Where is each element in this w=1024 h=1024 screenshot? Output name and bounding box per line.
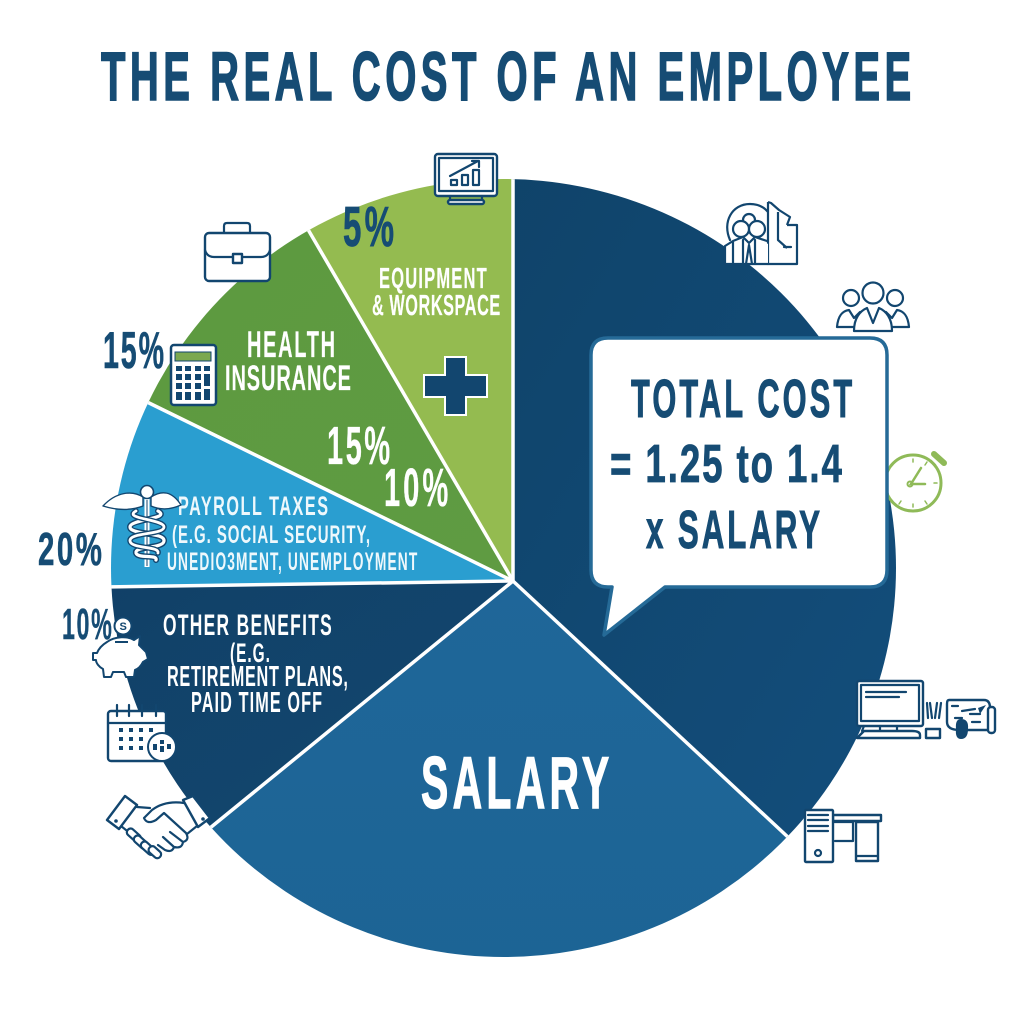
percent: 20%: 20%: [38, 525, 102, 576]
callout: total cost: TOTAL COST: [631, 369, 852, 429]
icon: calendar: [108, 705, 176, 761]
label: other benefits: (E.G.: [230, 637, 270, 668]
callout: total cost: x SALARY: [646, 500, 820, 560]
label: health insurance: INSURANCE: [225, 359, 351, 399]
icon: stopwatch: [885, 454, 944, 511]
callout: total cost: [591, 338, 887, 635]
label: payroll taxes: UNEDIO3MENT, UNEMPLOYMENT: [167, 549, 418, 576]
icon: team with door: [725, 202, 797, 264]
callout: total cost: = 1.25 to 1.4: [610, 433, 842, 494]
icon: monitor with chart: [435, 154, 497, 204]
label: health insurance: HEALTH: [247, 325, 335, 366]
icon: briefcase: [205, 223, 270, 281]
percent: outer 15%: 15%: [103, 321, 164, 379]
slice: payroll taxes: [111, 402, 506, 587]
slice: salary: [210, 583, 788, 957]
label: other benefits: PAID TIME OFF: [191, 686, 322, 718]
icon: computer and desk tools: [857, 681, 995, 739]
label: other benefits: [163, 609, 348, 718]
slice: equipment and workspace: [308, 179, 513, 575]
icon: caduceus: [103, 486, 181, 567]
title: THE REAL COST OF AN EMPLOYEE: [101, 38, 911, 115]
icon: team of three: [837, 282, 909, 331]
label: health insurance: [225, 325, 351, 399]
icon: tower pc and desk: [805, 810, 881, 862]
slice: health insurance: [148, 230, 509, 577]
label: equipment and workspace: EQUIPMENT: [379, 263, 487, 295]
icon: calculator: [171, 345, 216, 405]
label: payroll taxes: (E.G. SOCIAL SECURITY,: [172, 521, 370, 549]
percent: inner 15%: 15%: [327, 417, 390, 476]
label: payroll taxes: PAYROLL TAXES: [178, 491, 328, 521]
pie chart: [111, 179, 896, 957]
icon: piggy bank: S: [120, 621, 127, 633]
salary label: SALARY: [421, 741, 609, 824]
slice: other benefits: [112, 582, 508, 827]
icon: piggy bank: [93, 618, 148, 677]
percent: 5%: 5%: [343, 195, 394, 258]
icon: handshake: [107, 796, 210, 860]
label: other benefits: RETIREMENT PLANS,: [167, 660, 348, 692]
label: payroll taxes: [167, 491, 418, 576]
label: equipment and workspace: [372, 263, 500, 321]
slice: total cost navy: [513, 179, 896, 836]
label: equipment and workspace: & WORKSPACE: [372, 289, 500, 321]
percent: outer 10%: 10%: [62, 600, 112, 649]
icon: medical cross: [424, 357, 487, 415]
percent: inner 10%: 10%: [384, 459, 448, 518]
label: other benefits: OTHER BENEFITS: [163, 609, 332, 642]
